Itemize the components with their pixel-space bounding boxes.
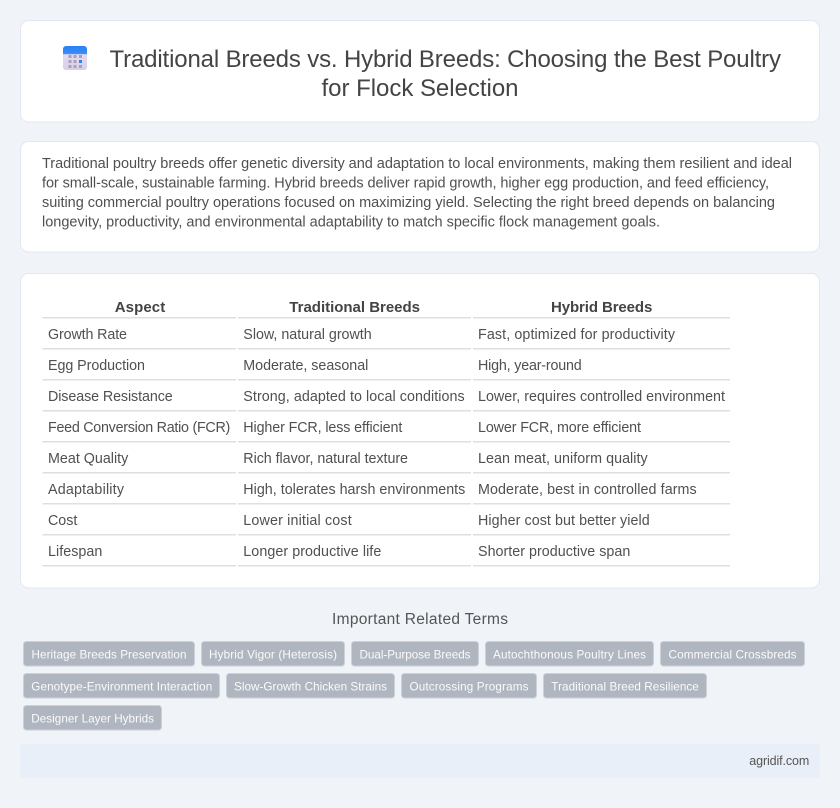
text block: introduction paragraph: suiting commercial poultry operations focused on maximizing yield. Selecting the right breed depends on balancing xyxy=(42,195,775,211)
table row: Egg Production: High, year-round xyxy=(478,358,582,374)
tag: Commercial Crossbreds xyxy=(660,642,804,666)
table row: Disease Resistance: Disease Resistance xyxy=(48,389,173,405)
text block: introduction paragraph: for small-scale, sustainable farming. Hybrid breeds deliver rapid growth, higher egg production, and feed efficiency, xyxy=(42,176,769,192)
tag: Outcrossing Programs: Outcrossing Programs xyxy=(410,680,529,693)
panel: comparison table xyxy=(20,274,820,588)
table row: Egg Production xyxy=(42,358,730,380)
tag: Hybrid Vigor (Heterosis) xyxy=(202,642,344,666)
icon: calendar xyxy=(63,46,87,70)
tag: Traditional Breed Resilience xyxy=(544,674,706,698)
table row: Feed Conversion Ratio: Higher FCR, less efficient xyxy=(243,420,402,436)
tag: Genotype-Environment Interaction: Genotype-Environment Interaction xyxy=(31,680,212,693)
panel: introduction xyxy=(20,142,820,252)
title: Traditional Breeds vs. Hybrid Breeds: Choosing the Best Poultry xyxy=(110,46,781,73)
tag: Designer Layer Hybrids: Designer Layer Hybrids xyxy=(31,712,154,725)
table row: Adaptability: Moderate, best in controlled farms xyxy=(478,482,697,498)
table row: Adaptability xyxy=(42,482,730,504)
table row: Cost: Higher cost but better yield xyxy=(478,513,650,529)
tag: Slow-Growth Chicken Strains: Slow-Growth Chicken Strains xyxy=(234,680,387,693)
tag list: related terms xyxy=(24,642,804,730)
table row: Adaptability: Adaptability xyxy=(48,482,125,498)
table header row: Traditional Breeds xyxy=(289,299,420,316)
table row: Feed Conversion Ratio xyxy=(42,420,730,442)
table row: Adaptability: High, tolerates harsh environments xyxy=(243,482,465,498)
panel: title header xyxy=(20,20,820,122)
footer xyxy=(20,744,820,778)
text block: introduction paragraph: longevity, productivity, and environmental adaptability to match specific flock management goals. xyxy=(42,214,660,230)
table row: Feed Conversion Ratio: Feed Conversion Ratio (FCR) xyxy=(48,420,230,436)
tag: Autochthonous Poultry Lines xyxy=(486,642,654,666)
title: for Flock Selection xyxy=(322,75,518,102)
table row: Cost: Lower initial cost xyxy=(243,513,352,529)
table row: Cost xyxy=(42,513,730,536)
table row: Meat Quality: Rich flavor, natural texture xyxy=(243,451,408,467)
tag: Traditional Breed Resilience: Traditional Breed Resilience xyxy=(551,680,699,693)
table row: Growth Rate: Fast, optimized for productivity xyxy=(478,327,676,343)
tag: Heritage Breeds Preservation xyxy=(24,642,194,666)
tag: Slow-Growth Chicken Strains xyxy=(226,674,394,698)
table row: Growth Rate xyxy=(42,327,730,350)
table row: Lifespan xyxy=(42,544,730,566)
table row: Growth Rate: Slow, natural growth xyxy=(243,327,372,343)
text block: introduction paragraph xyxy=(42,156,792,230)
tag: Dual-Purpose Breeds xyxy=(352,642,478,666)
tag: Designer Layer Hybrids xyxy=(24,706,162,730)
table row: Lifespan: Lifespan xyxy=(48,544,102,560)
tag: Genotype-Environment Interaction xyxy=(24,674,220,698)
table row: Disease Resistance: Lower, requires controlled environment xyxy=(478,389,725,405)
table header row xyxy=(42,299,730,318)
table row: Egg Production: Moderate, seasonal xyxy=(243,358,368,374)
tag: Hybrid Vigor (Heterosis): Hybrid Vigor (Heterosis) xyxy=(209,648,337,661)
table row: Feed Conversion Ratio: Lower FCR, more efficient xyxy=(478,420,641,436)
table row: Meat Quality: Lean meat, uniform quality xyxy=(478,451,649,467)
tag: Dual-Purpose Breeds: Dual-Purpose Breeds xyxy=(360,648,471,661)
tag: Commercial Crossbreds: Commercial Crossbreds xyxy=(668,648,797,661)
table row: Meat Quality xyxy=(42,451,730,474)
table row: Cost: Cost xyxy=(48,513,77,529)
table row: Disease Resistance xyxy=(42,389,730,412)
table row: Egg Production: Egg Production xyxy=(48,358,145,374)
table header row: Hybrid Breeds xyxy=(551,299,652,316)
table row: Growth Rate: Growth Rate xyxy=(48,327,127,343)
title xyxy=(110,46,781,102)
heading: Important Related Terms: Important Related Terms xyxy=(332,611,508,628)
tag: Outcrossing Programs xyxy=(402,674,536,698)
footer: agridif.com xyxy=(749,754,809,768)
table row: Lifespan: Shorter productive span xyxy=(478,544,630,560)
table row: Lifespan: Longer productive life xyxy=(243,544,381,560)
table row: Disease Resistance: Strong, adapted to local conditions xyxy=(243,389,465,405)
tag: Heritage Breeds Preservation: Heritage Breeds Preservation xyxy=(32,648,186,661)
table row: Meat Quality: Meat Quality xyxy=(48,451,129,467)
table header row: Aspect xyxy=(115,299,165,316)
text block: introduction paragraph: Traditional poultry breeds offer genetic diversity and adaptation to local environments, making them resilient and ideal xyxy=(42,156,792,172)
tag: Autochthonous Poultry Lines: Autochthonous Poultry Lines xyxy=(493,648,646,661)
